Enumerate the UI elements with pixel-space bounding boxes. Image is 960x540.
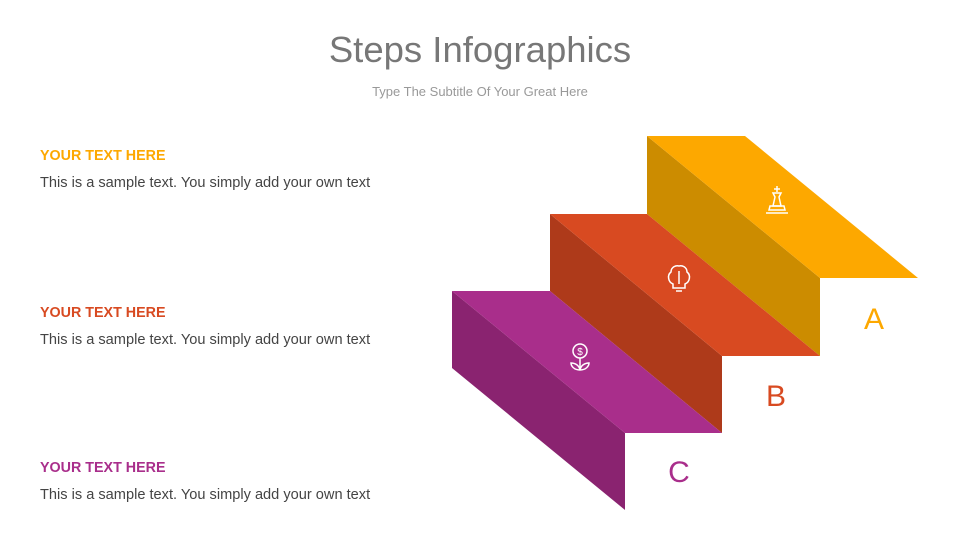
body B: This is a sample text. You simply add your own text <box>40 332 370 348</box>
icon: money flower <box>571 344 589 370</box>
text block B <box>40 305 370 348</box>
step C <box>452 291 722 510</box>
icon: brain bulb <box>669 266 689 291</box>
heading B: YOUR TEXT HERE <box>40 305 166 321</box>
step A <box>647 136 918 356</box>
label A: A <box>864 303 884 336</box>
heading C: YOUR TEXT HERE <box>40 460 166 476</box>
text block C <box>40 460 370 503</box>
body C: This is a sample text. You simply add your own text <box>40 487 370 503</box>
heading A: YOUR TEXT HERE <box>40 148 166 164</box>
icon: chess king <box>766 186 788 213</box>
label B: B <box>766 380 786 413</box>
title: Steps Infographics <box>329 29 631 70</box>
step B <box>550 214 820 433</box>
label C: C <box>668 456 690 489</box>
subtitle: Type The Subtitle Of Your Great Here <box>372 84 588 99</box>
text block A <box>40 148 370 191</box>
body A: This is a sample text. You simply add your own text <box>40 175 370 191</box>
icon: money flower: $ <box>577 347 583 358</box>
